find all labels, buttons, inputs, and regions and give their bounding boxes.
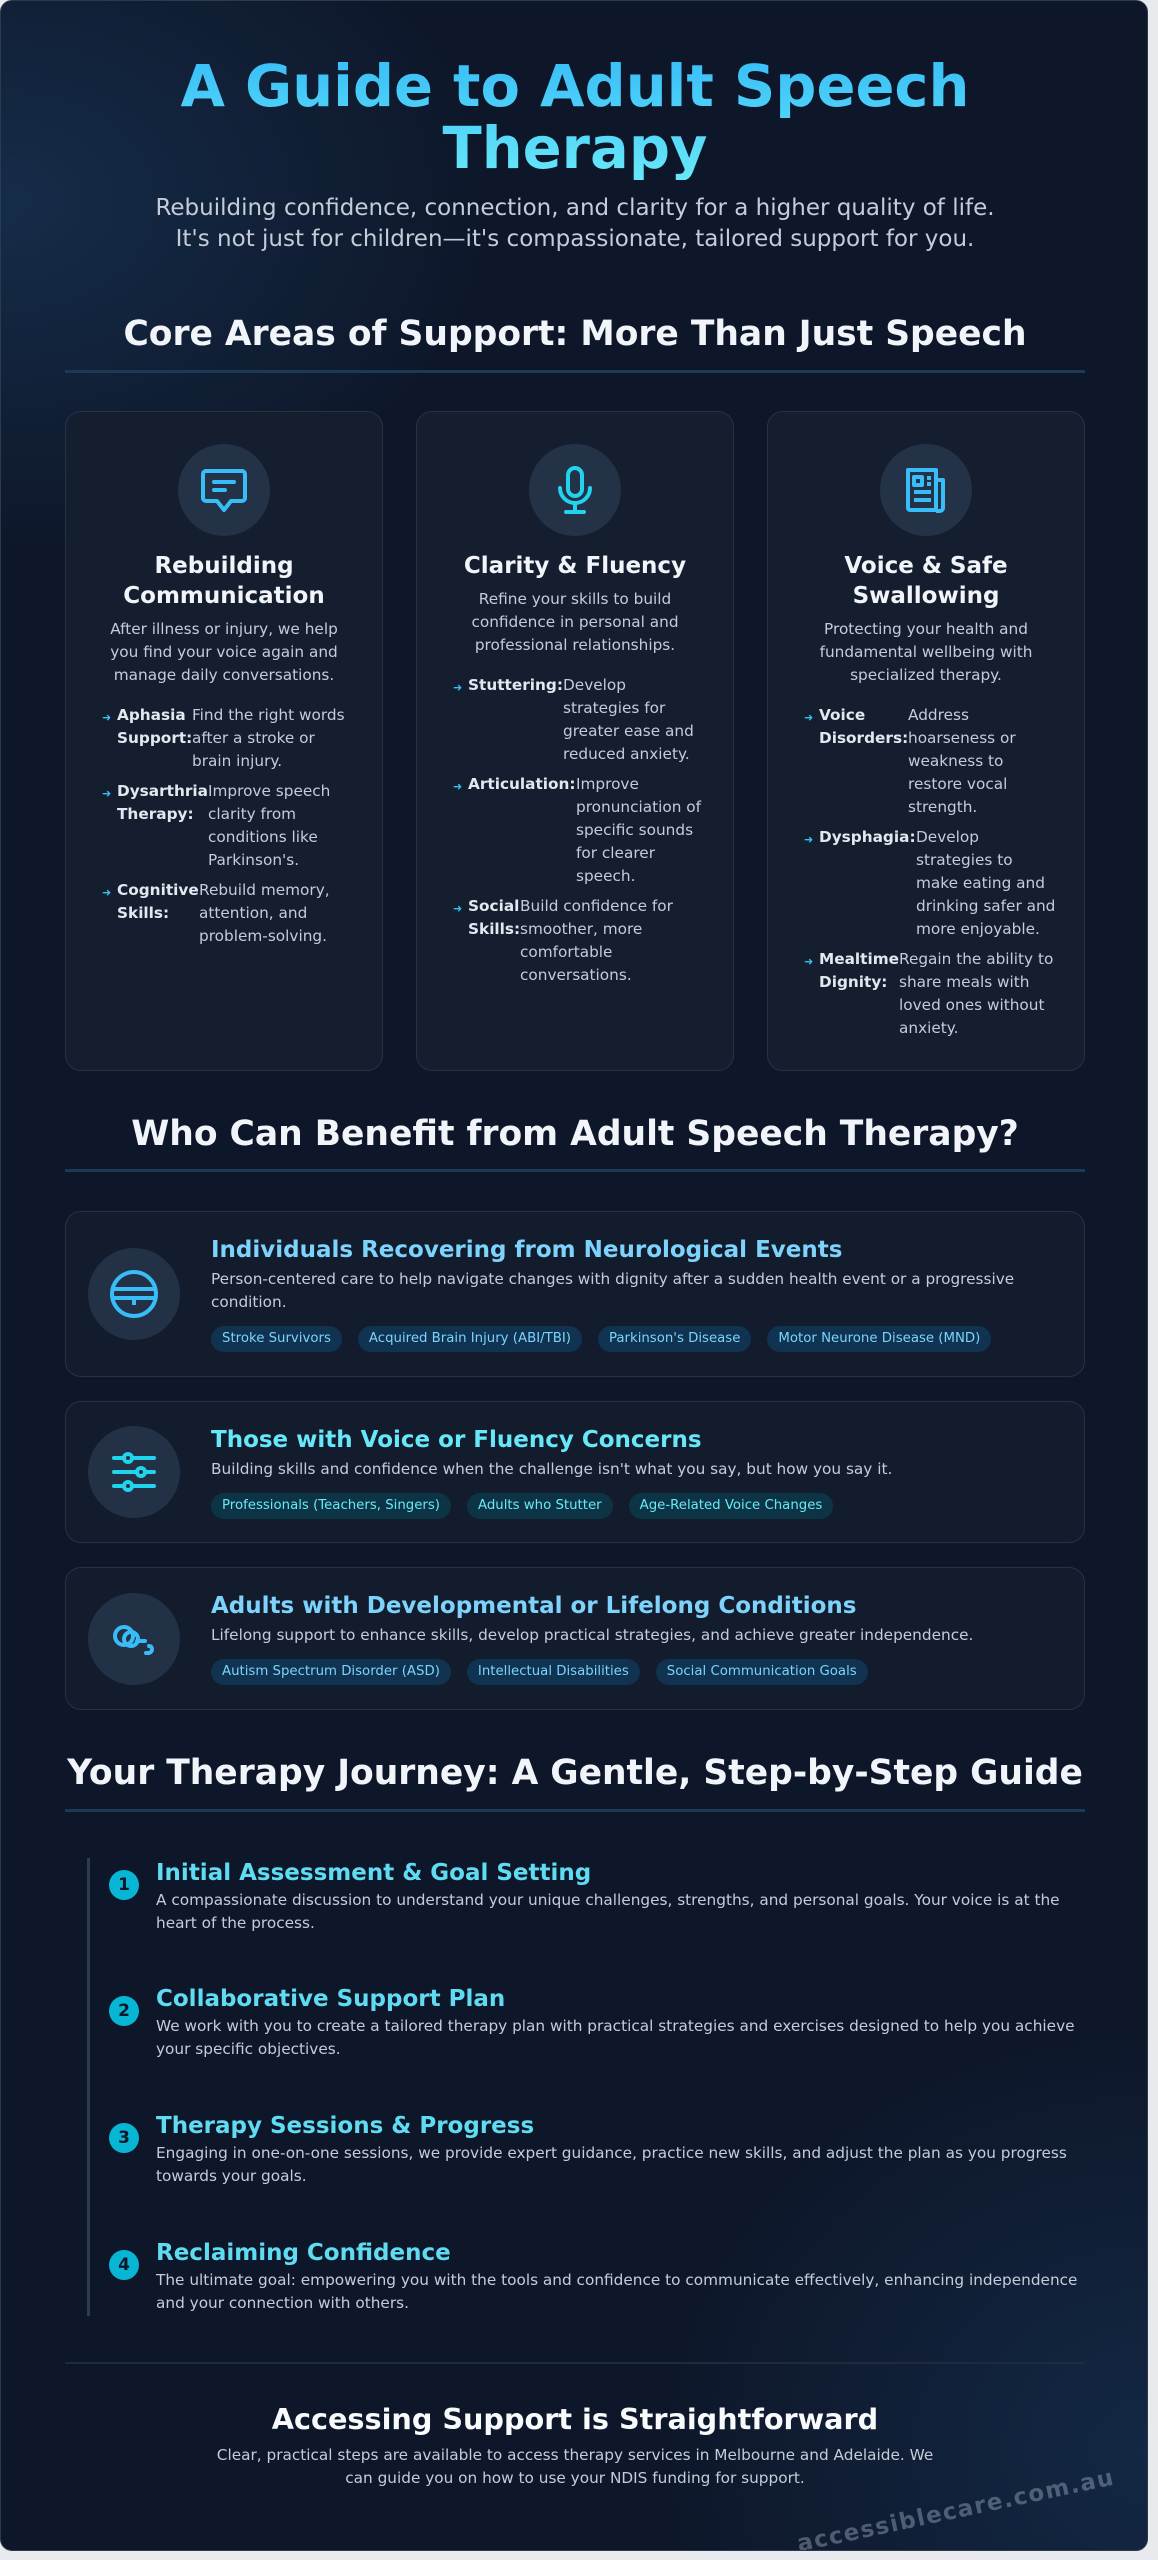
icon: brain (88, 1248, 180, 1340)
list: Stuttering: (468, 676, 563, 694)
subtitle: Rebuilding confidence, connection, and clarity for a higher quality of life. (155, 195, 995, 221)
step 4: The ultimate goal: empowering you with the tools and confidence to communicate effectively, enhancing independence (156, 2271, 1077, 2289)
panel: clarity & fluency (416, 411, 734, 1071)
list: after a stroke or (192, 729, 315, 747)
list: Articulation: (468, 775, 576, 793)
tags: Motor Neurone Disease (MND) (778, 1331, 980, 1346)
step 1 (109, 1860, 1060, 1932)
title: A Guide to Adult Speech (181, 53, 969, 120)
step 2 (109, 1986, 1075, 2058)
icon: chat bubble (178, 444, 270, 536)
card description: Protecting your health and (824, 620, 1028, 638)
list: ➜ (804, 833, 813, 846)
panel: neurological events (65, 1211, 1085, 1377)
list: greater ease and (563, 722, 694, 740)
list: ➜ (804, 955, 813, 968)
list: Skills: (117, 904, 169, 922)
card description: confidence in personal and (471, 613, 679, 631)
list: for clearer (576, 844, 655, 862)
list: ➜ (804, 711, 813, 724)
list: drinking safer and (916, 897, 1055, 915)
list: ➜ (453, 780, 462, 793)
card title: Voice & Safe (844, 553, 1008, 579)
list: smoother, more (520, 920, 642, 938)
tags (211, 1326, 991, 1352)
list: Improve (576, 775, 639, 793)
row title: Adults with Developmental or Lifelong Conditions (211, 1593, 856, 1619)
list: ➜ (453, 902, 462, 915)
list: ➜ (102, 711, 111, 724)
card description: professional relationships. (475, 636, 675, 654)
list: Voice (819, 706, 865, 724)
icon: newspaper (880, 444, 972, 536)
list: Support: (117, 729, 192, 747)
list: specific sounds (576, 821, 693, 839)
step 4 (109, 2240, 1077, 2312)
list: Disorders: (819, 729, 908, 747)
list: ➜ (453, 681, 462, 694)
row description: condition. (211, 1293, 287, 1311)
card title: Communication (123, 583, 325, 609)
footer text (217, 2446, 933, 2487)
list: Rebuild memory, (199, 881, 330, 899)
list: Dignity: (819, 973, 887, 991)
list: more enjoyable. (916, 920, 1040, 938)
tags: Stroke Survivors (222, 1331, 331, 1346)
list: Therapy: (117, 805, 194, 823)
tags: Age-Related Voice Changes (640, 1498, 822, 1513)
card description: fundamental wellbeing with (820, 643, 1032, 661)
row description: Person-centered care to help navigate changes with dignity after a sudden health event or a progressive (211, 1270, 1014, 1288)
list: Develop (563, 676, 626, 694)
list: attention, and (199, 904, 307, 922)
subtitle (155, 195, 995, 252)
step 3: Engaging in one-on-one sessions, we provide expert guidance, practice new skills, and adjust the plan as you progress (156, 2144, 1067, 2162)
list (102, 706, 345, 945)
tags: Adults who Stutter (478, 1498, 602, 1513)
footer text: can guide you on how to use your NDIS funding for support. (345, 2469, 805, 2487)
row description (211, 1270, 1014, 1311)
list: Skills: (468, 920, 520, 938)
card title (123, 553, 325, 609)
card title: Clarity & Fluency (464, 553, 686, 579)
tags: Acquired Brain Injury (ABI/TBI) (369, 1331, 571, 1346)
row description: Lifelong support to enhance skills, develop practical strategies, and achieve greater independence. (211, 1626, 973, 1644)
step 2: We work with you to create a tailored therapy plan with practical strategies and exercises designed to help you achieve (156, 2017, 1075, 2035)
card description: specialized therapy. (850, 666, 1002, 684)
step 1: heart of the process. (156, 1914, 315, 1932)
card description (110, 620, 338, 684)
list: clarity from (208, 805, 296, 823)
tags (211, 1659, 868, 1685)
list: Regain the ability to (899, 950, 1053, 968)
list: strategies for (563, 699, 665, 717)
list: loved ones without (899, 996, 1044, 1014)
card title (844, 553, 1008, 609)
row title: Those with Voice or Fluency Concerns (211, 1427, 702, 1453)
panel: developmental conditions (65, 1567, 1085, 1710)
card title: Rebuilding (154, 553, 294, 579)
list: speech. (576, 867, 635, 885)
footer heading: Accessing Support is Straightforward (272, 2402, 878, 2436)
list: Address (908, 706, 969, 724)
footer text: Clear, practical steps are available to access therapy services in Melbourne and Adelaide. We (217, 2446, 933, 2464)
step 3: Therapy Sessions & Progress (156, 2113, 534, 2139)
list: strength. (908, 798, 977, 816)
heading: core areas: Core Areas of Support: More Than Just Speech (123, 314, 1027, 354)
row description: Building skills and confidence when the challenge isn't what you say, but how you say it. (211, 1460, 892, 1478)
list (453, 676, 702, 984)
card description: Refine your skills to build (479, 590, 671, 608)
list: conversations. (520, 966, 632, 984)
list: Dysphagia: (819, 828, 916, 846)
list: share meals with (899, 973, 1030, 991)
list (804, 706, 1055, 1037)
list: reduced anxiety. (563, 745, 690, 763)
timeline (87, 1858, 90, 2316)
list: brain injury. (192, 752, 282, 770)
list: Social (468, 897, 519, 915)
step 2: your specific objectives. (156, 2040, 341, 2058)
tags: Autism Spectrum Disorder (ASD) (222, 1664, 440, 1679)
list: Mealtime (819, 950, 899, 968)
step 2: Collaborative Support Plan (156, 1986, 505, 2012)
step 1: A compassionate discussion to understand your unique challenges, strengths, and personal goals. Your voice is at the (156, 1891, 1060, 1909)
list: Dysarthria (117, 782, 208, 800)
subtitle: It's not just for children—it's compassionate, tailored support for you. (176, 226, 974, 252)
step 4: Reclaiming Confidence (156, 2240, 451, 2266)
heading: who can benefit: Who Can Benefit from Adult Speech Therapy? (131, 1114, 1019, 1154)
list: problem-solving. (199, 927, 327, 945)
card description: manage daily conversations. (114, 666, 334, 684)
list: anxiety. (899, 1019, 959, 1037)
title (1, 56, 1149, 180)
list: conditions like (208, 828, 318, 846)
heading: therapy journey: Your Therapy Journey: A Gentle, Step-by-Step Guide (67, 1753, 1083, 1793)
step 4: 4 (118, 2255, 130, 2275)
tags: Social Communication Goals (667, 1664, 857, 1679)
tags: Parkinson's Disease (609, 1331, 740, 1346)
title: Therapy (443, 115, 707, 182)
list: weakness to (908, 752, 1003, 770)
step 1: Initial Assessment & Goal Setting (156, 1860, 591, 1886)
list: Cognitive (117, 881, 199, 899)
tags: Professionals (Teachers, Singers) (222, 1498, 440, 1513)
icon: microphone (529, 444, 621, 536)
icon: sliders (88, 1426, 180, 1518)
list: hoarseness or (908, 729, 1016, 747)
card description (471, 590, 679, 654)
tags (211, 1493, 833, 1519)
card description (820, 620, 1032, 684)
step 3: towards your goals. (156, 2167, 307, 2185)
row title: Individuals Recovering from Neurological Events (211, 1237, 842, 1263)
card description: you find your voice again and (110, 643, 338, 661)
step 1: 1 (118, 1875, 130, 1895)
list: strategies to (916, 851, 1013, 869)
list: Aphasia (117, 706, 186, 724)
list: ➜ (102, 886, 111, 899)
list: Parkinson's. (208, 851, 299, 869)
list: Develop (916, 828, 979, 846)
card description: After illness or injury, we help (110, 620, 338, 638)
card title: Swallowing (853, 583, 999, 609)
list: Find the right words (192, 706, 345, 724)
step 3 (109, 2113, 1067, 2185)
step 4: and your connection with others. (156, 2294, 409, 2312)
panel: rebuilding communication (65, 411, 383, 1071)
list: restore vocal (908, 775, 1007, 793)
list: ➜ (102, 787, 111, 800)
panel: voice or fluency concerns (65, 1401, 1085, 1543)
list: make eating and (916, 874, 1045, 892)
list: comfortable (520, 943, 612, 961)
step 2: 2 (118, 2001, 130, 2021)
step 3: 3 (118, 2128, 130, 2148)
list: pronunciation of (576, 798, 701, 816)
list: Build confidence for (520, 897, 673, 915)
icon: people (88, 1593, 180, 1685)
tags: Intellectual Disabilities (478, 1664, 629, 1679)
list: Improve speech (208, 782, 330, 800)
panel: voice & safe swallowing (767, 411, 1085, 1071)
